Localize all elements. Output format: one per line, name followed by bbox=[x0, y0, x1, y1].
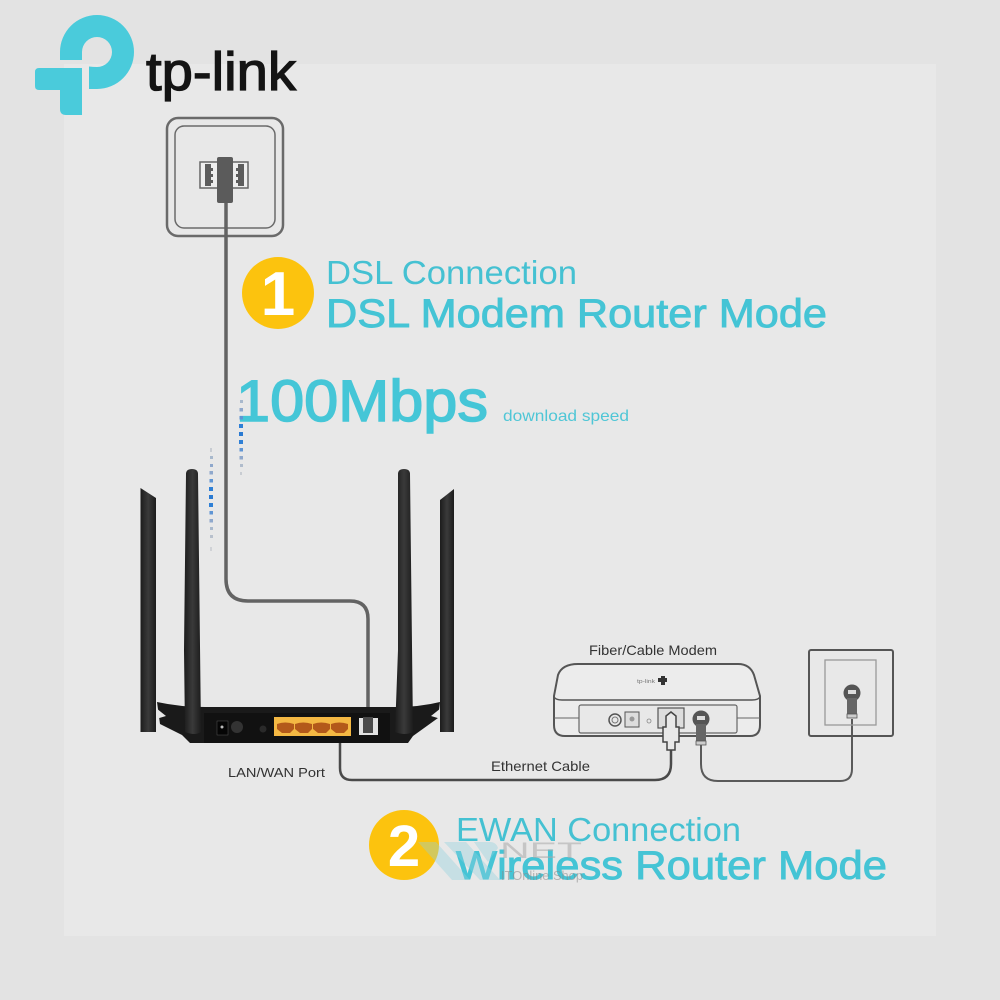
router body bbox=[157, 702, 440, 743]
modem casing bbox=[554, 664, 760, 736]
rear panel bbox=[204, 713, 390, 743]
DSL port bbox=[359, 718, 378, 735]
ethernet plug bbox=[663, 712, 679, 750]
coax plug bbox=[692, 710, 710, 728]
heading: EWAN connection: EWAN Connection bbox=[456, 811, 741, 848]
wordmark: tp-link bbox=[146, 42, 297, 102]
antenna: far right bbox=[440, 489, 454, 732]
antenna: inner left bbox=[184, 469, 201, 734]
heading: DSL connection: DSL Connection bbox=[326, 254, 577, 291]
step 1 badge bbox=[242, 257, 314, 329]
LAN/WAN label: LAN/WAN Port bbox=[228, 765, 325, 780]
heading: DSL connection bbox=[326, 254, 827, 336]
fiber/cable modem bbox=[554, 664, 760, 750]
icon: DSL wall socket bbox=[167, 118, 283, 236]
watermark bbox=[418, 838, 583, 883]
speed label: 100Mbps bbox=[236, 369, 488, 434]
antenna: far left bbox=[140, 488, 156, 732]
logo: tp-link bbox=[35, 15, 297, 115]
logo on modem bbox=[637, 676, 667, 685]
modem label: Fiber/Cable Modem bbox=[589, 642, 717, 658]
logo on modem: tp-link bbox=[637, 679, 656, 685]
heading: EWAN connection bbox=[456, 811, 887, 888]
heading: EWAN connection: Wireless Router Mode bbox=[456, 844, 887, 888]
coax cable bbox=[701, 719, 852, 781]
signal dots left bbox=[209, 448, 213, 551]
signal dots right bbox=[239, 400, 243, 475]
power button bbox=[231, 721, 243, 733]
icon: tp-link symbol bbox=[35, 15, 134, 115]
watermark: NET bbox=[500, 838, 582, 863]
DSL cable bbox=[226, 203, 368, 718]
port panel bbox=[579, 705, 737, 733]
speed label bbox=[236, 369, 629, 434]
icon: coax wall socket bbox=[809, 650, 893, 736]
step 2 badge: 2 bbox=[388, 814, 420, 879]
watermark: ITOnline Shop bbox=[501, 868, 583, 883]
step 2 badge bbox=[369, 810, 439, 880]
step 1 badge: 1 bbox=[261, 260, 295, 329]
power port bbox=[217, 721, 228, 735]
heading: DSL connection: DSL Modem Router Mode bbox=[326, 292, 827, 336]
antenna gaps bbox=[156, 708, 441, 719]
LAN ports bbox=[274, 717, 351, 736]
ethernet cable bbox=[340, 743, 671, 780]
ethernet cable label: Ethernet Cable bbox=[491, 758, 590, 774]
router bbox=[140, 469, 454, 743]
antenna: inner right bbox=[395, 469, 413, 734]
speed label: download speed bbox=[503, 408, 629, 425]
